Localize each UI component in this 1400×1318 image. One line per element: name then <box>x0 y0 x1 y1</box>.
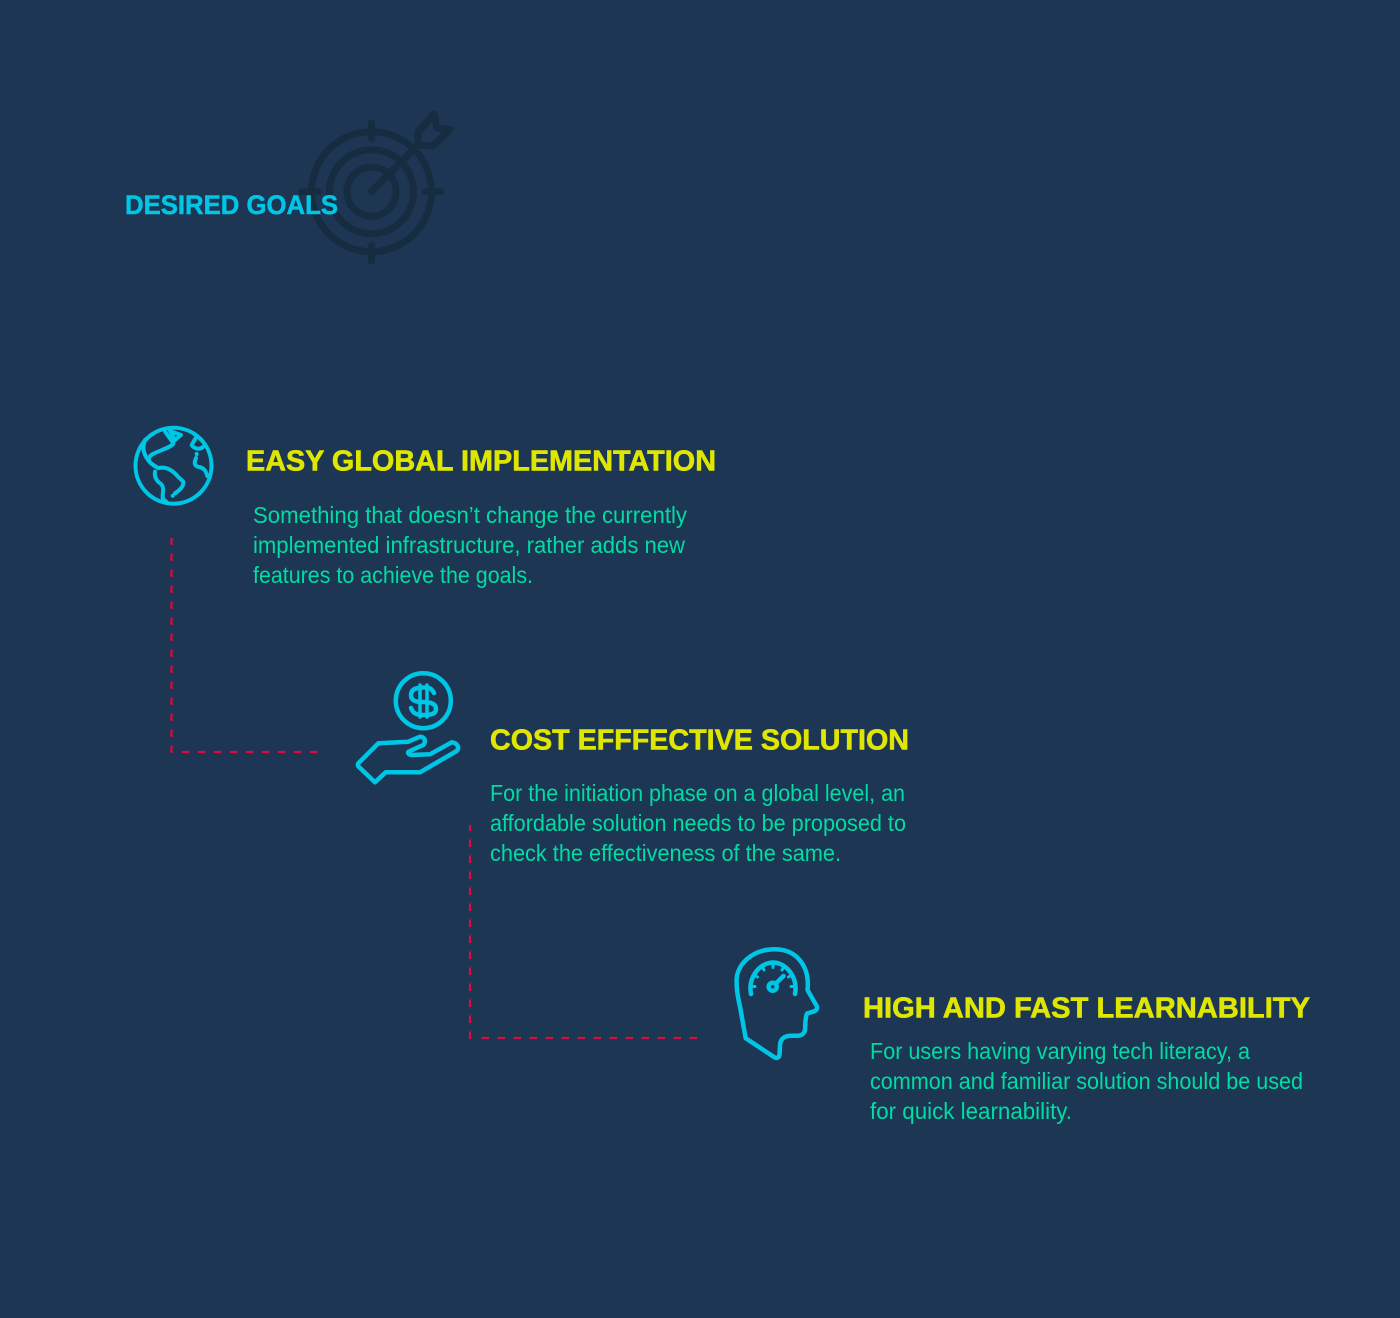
text block: cost effective solution: For the initiation phase on a global level, an <box>490 780 905 806</box>
text block: high and fast learnability: for quick learnability. <box>870 1098 1072 1124</box>
heading: high and fast learnability: HIGH AND FAST LEARNABILITY <box>863 992 1310 1024</box>
icon: coin in open hand <box>358 673 458 782</box>
text block: easy global implementation: features to achieve the goals. <box>253 562 533 588</box>
text block: high and fast learnability <box>870 1038 1303 1124</box>
heading: cost effective solution: COST EFFFECTIVE SOLUTION <box>490 724 909 756</box>
text block: high and fast learnability: For users having varying tech literacy, a <box>870 1038 1250 1064</box>
text block: cost effective solution: affordable solution needs to be proposed to <box>490 810 906 836</box>
heading: easy global implementation: EASY GLOBAL IMPLEMENTATION <box>246 446 716 478</box>
text block: high and fast learnability: common and familiar solution should be used <box>870 1068 1303 1094</box>
text block: easy global implementation <box>253 502 687 588</box>
text block: cost effective solution <box>490 780 906 866</box>
text block: easy global implementation: Something that doesn’t change the currently <box>253 502 687 528</box>
heading: desired goals: DESIRED GOALS <box>125 190 338 220</box>
arrow: dashed connector one <box>172 538 318 753</box>
arrow: dashed connector two <box>470 825 697 1039</box>
icon: globe <box>136 428 212 504</box>
icon: target with arrow <box>302 114 450 261</box>
icon: head with speedometer <box>737 949 817 1058</box>
text block: easy global implementation: implemented infrastructure, rather adds new <box>253 532 685 558</box>
text block: cost effective solution: check the effectiveness of the same. <box>490 840 841 866</box>
